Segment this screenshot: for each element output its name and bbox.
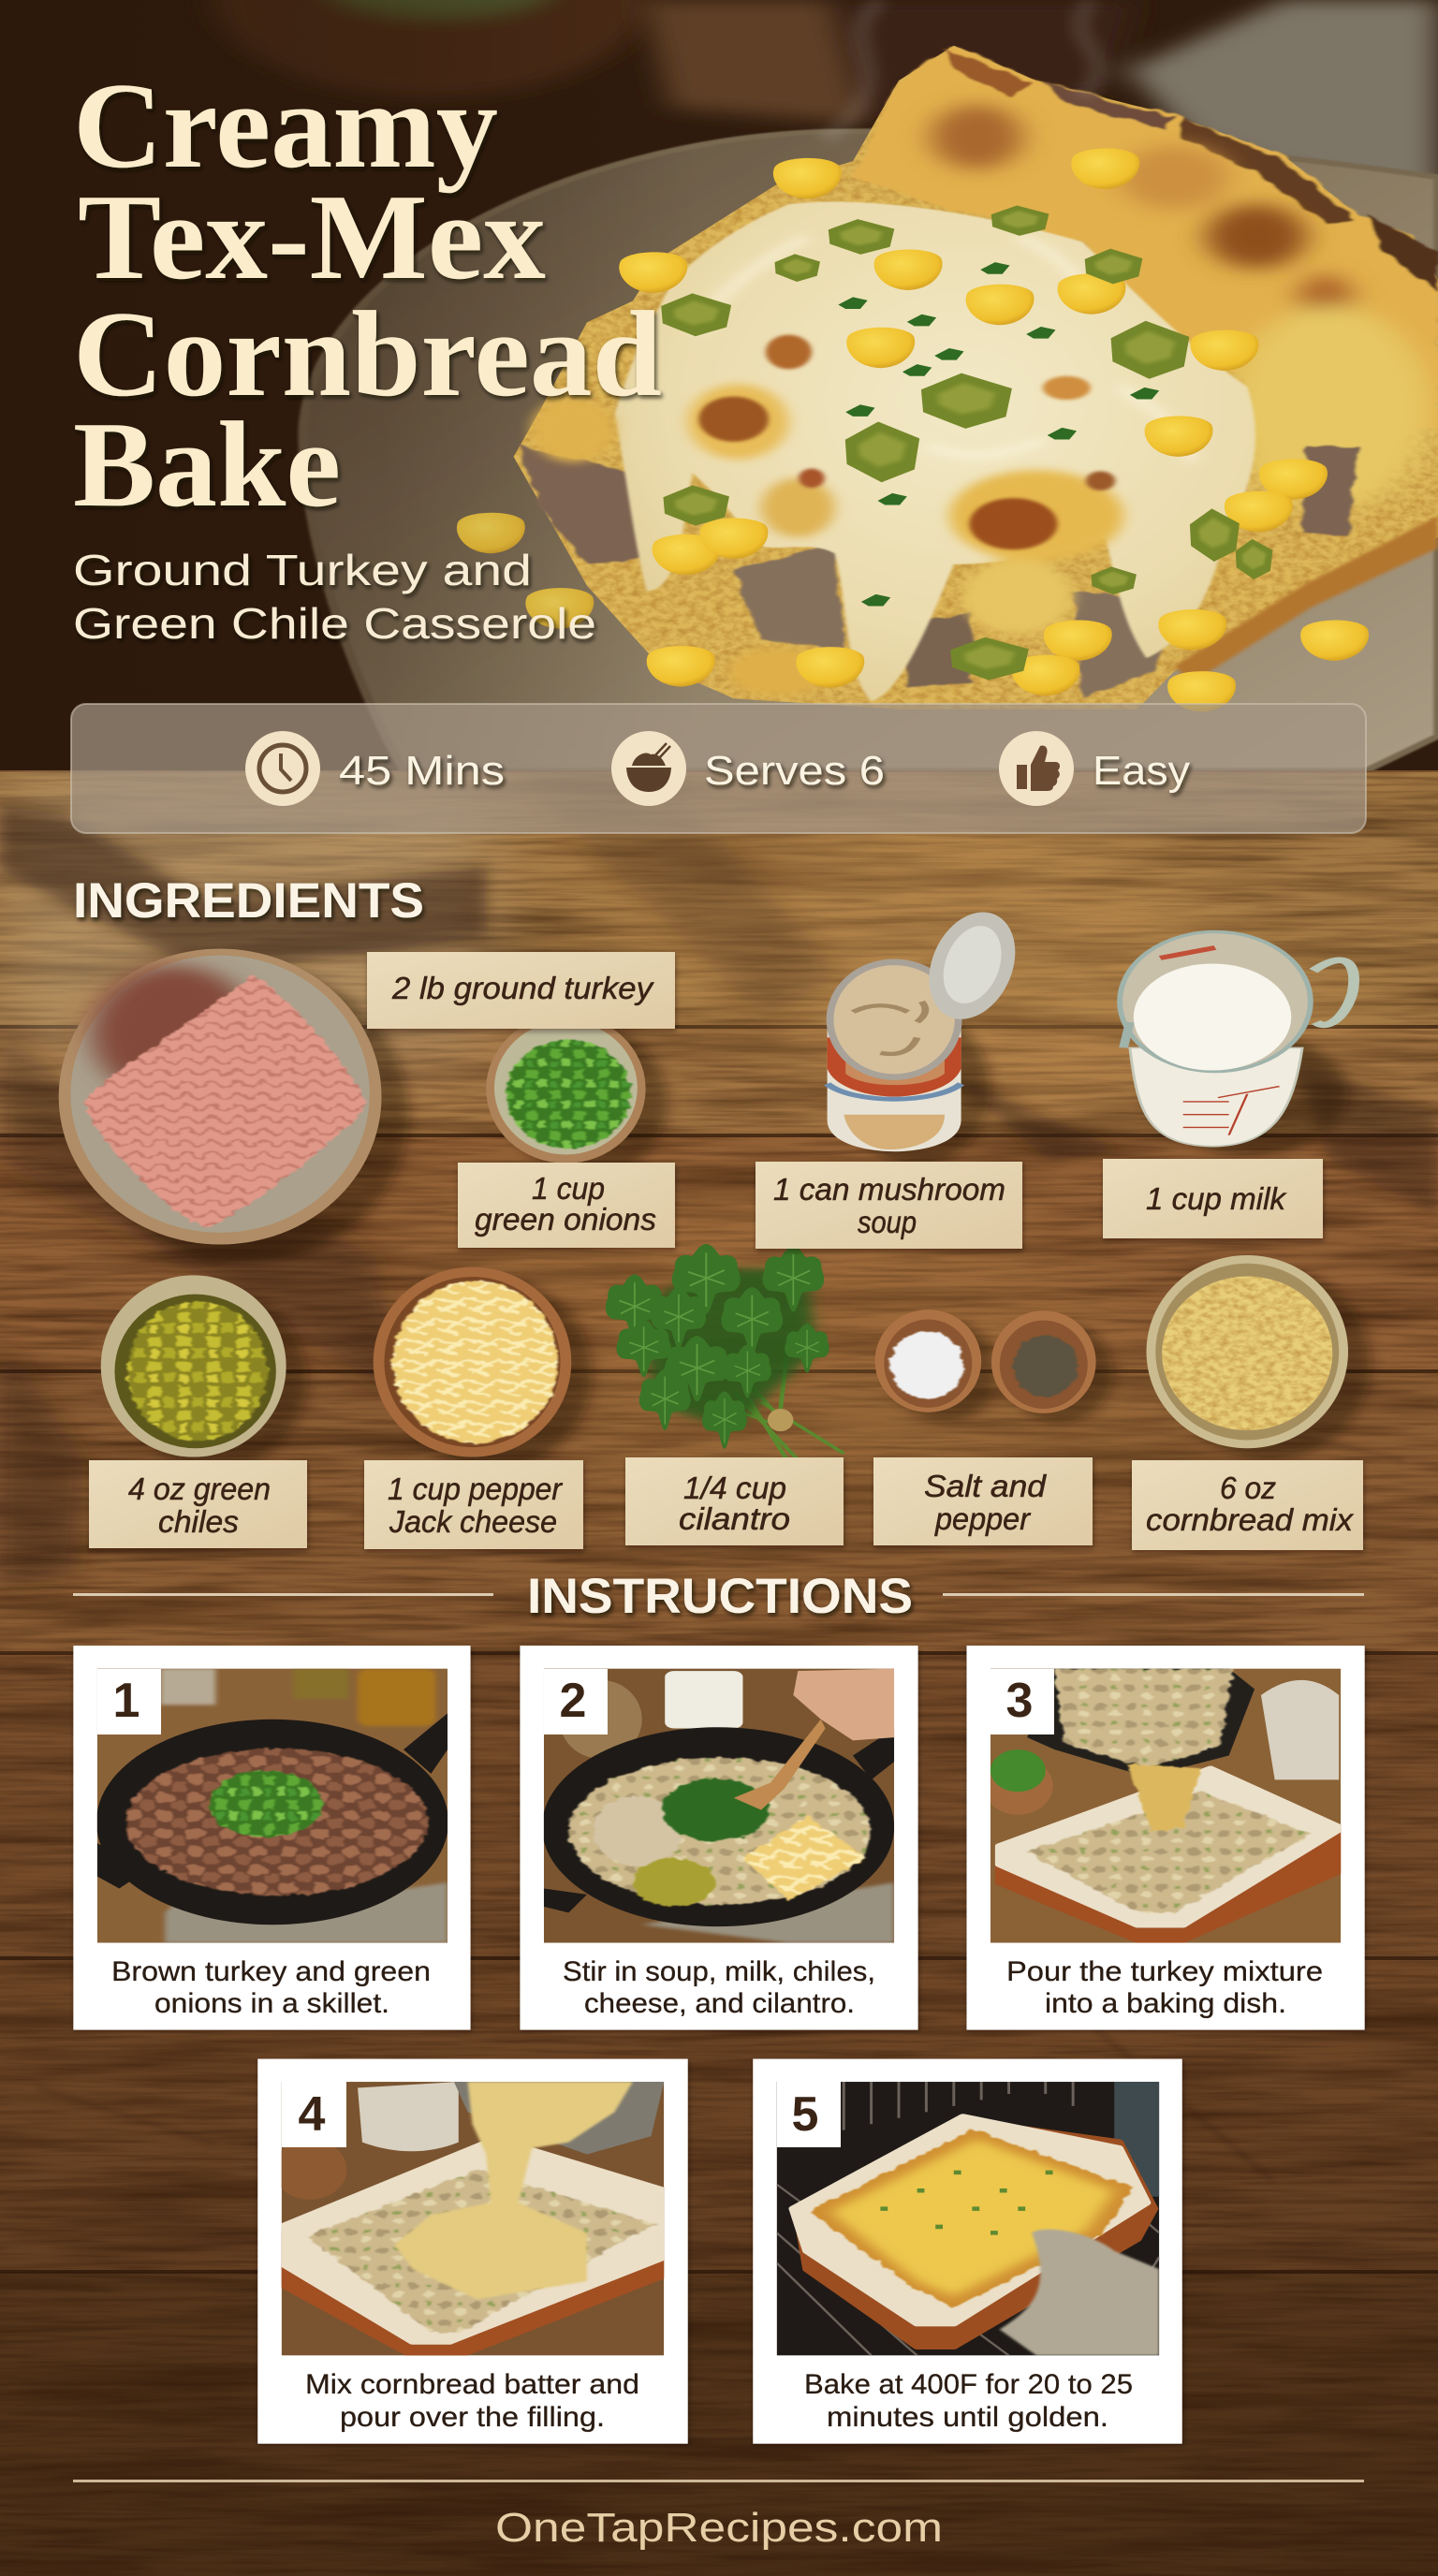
title: Tex-Mex (78, 169, 546, 305)
melted cheese (614, 202, 1255, 701)
text: time: 45 Mins (339, 748, 505, 794)
background wood beam and linen (638, 0, 1438, 175)
step 1 photo: browning turkey (96, 1669, 448, 1943)
label: pepper jack cheese: Jack cheese (389, 1504, 557, 1539)
step 5 number and caption: Bake at 400F for 20 to 25 (804, 2369, 1133, 2400)
step 3 number and caption: into a baking dish. (1045, 1988, 1286, 2019)
label: mushroom soup: 1 can mushroom (773, 1172, 1005, 1207)
label: ground turkey: 2 lb ground turkey (391, 971, 655, 1005)
step 5 card (753, 2059, 1182, 2444)
label: green onions: 1 cup (532, 1171, 605, 1206)
footer (73, 2480, 1364, 2551)
step 2 card (520, 1646, 918, 2030)
label: salt and pepper: pepper (934, 1501, 1032, 1536)
label: mushroom soup: soup (858, 1205, 917, 1239)
green chile bowl (101, 1275, 307, 1471)
cornbread mix bowl (1146, 1255, 1372, 1460)
hero photo: casserole slice on plate (0, 0, 1438, 770)
wood table background (0, 763, 1438, 2576)
footer: OneTapRecipes.com (495, 2505, 943, 2551)
green onion bowl (486, 1015, 668, 1178)
subtitle: Ground Turkey and (73, 546, 532, 594)
text: servings: Serves 6 (704, 748, 885, 794)
step 1 number and caption: onions in a skillet. (154, 1988, 389, 2019)
step 2 number and caption: Stir in soup, milk, chiles, (563, 1956, 875, 1987)
step 4 number and caption: 4 (299, 2087, 326, 2142)
icon: thumbs up (999, 731, 1074, 806)
step 2 photo: stirring filling (542, 1669, 894, 1943)
label: cornbread mix (1132, 1460, 1363, 1550)
pepper bowl (991, 1310, 1113, 1424)
step 1 card (73, 1646, 471, 2030)
meat layer (518, 446, 1357, 698)
title (73, 58, 662, 533)
label: green chiles (89, 1460, 307, 1548)
cheese sheen (697, 237, 1192, 462)
label: mushroom soup (756, 1162, 1022, 1249)
step 3 number and caption: Pour the turkey mixture (1006, 1956, 1323, 1987)
green chiles (661, 205, 1272, 681)
subtitle (73, 546, 596, 648)
label: pepper jack cheese: 1 cup pepper (388, 1471, 564, 1506)
step cards (73, 1646, 1365, 2444)
browned cheese spots (698, 335, 1115, 549)
ingredient photos (59, 909, 1372, 1485)
crust base edge (1174, 516, 1438, 682)
turkey bowl (59, 949, 409, 1264)
step 3 number and caption (990, 1669, 1323, 2019)
casserole body (514, 46, 1438, 710)
pepper jack cheese bowl (374, 1267, 593, 1470)
step 4 card (257, 2059, 688, 2444)
text: difficulty: Easy (1093, 748, 1190, 794)
step 2 number and caption: cheese, and cilantro. (584, 1988, 855, 2019)
label: cilantro: 1/4 cup (683, 1471, 786, 1505)
milk measuring cup (1120, 931, 1354, 1156)
step 2 number and caption: 2 (560, 1674, 586, 1728)
step 4 photo: adding batter (273, 2082, 664, 2355)
step 4 number and caption: Mix cornbread batter and (305, 2369, 639, 2400)
step 1 number and caption: 1 (113, 1674, 139, 1728)
info bar (71, 704, 1366, 833)
step 1 number and caption (97, 1669, 431, 2019)
step 5 number and caption (777, 2082, 1133, 2433)
label: green chiles: 4 oz green (128, 1471, 271, 1506)
title: Bake (73, 397, 341, 533)
subtitle: Green Chile Casserole (73, 599, 596, 648)
title: Creamy (73, 58, 498, 194)
label: milk (1103, 1159, 1323, 1238)
icon: clock (245, 731, 320, 806)
step 4 number and caption: pour over the filling. (340, 2402, 605, 2433)
label: cornbread mix: 6 oz (1220, 1471, 1276, 1505)
cilantro bunch (606, 1244, 844, 1485)
label: green onions (458, 1163, 675, 1248)
heading: ingredients: INGREDIENTS (73, 873, 424, 929)
plate (302, 131, 1438, 770)
label: green chiles: chiles (158, 1504, 239, 1539)
step 3 photo: pouring into dish (983, 1669, 1341, 1943)
steam (826, 0, 1098, 139)
label: salt and pepper (873, 1457, 1093, 1545)
ingredient labels (89, 952, 1363, 1550)
salt bowl (875, 1310, 998, 1423)
corn kernels (457, 149, 1369, 712)
background bowl (211, 0, 652, 96)
icon: bowl (611, 731, 686, 806)
title: Cornbread (73, 286, 662, 422)
mushroom soup can (827, 909, 1026, 1166)
browned crust (853, 46, 1438, 430)
label: ground turkey (367, 952, 675, 1029)
label: green onions: green onions (475, 1202, 656, 1237)
step 5 photo: baking in oven (777, 2082, 1159, 2355)
step 2 number and caption (544, 1669, 875, 2019)
heading: instructions: INSTRUCTIONS (527, 1569, 913, 1624)
label: cornbread mix: cornbread mix (1146, 1502, 1355, 1537)
step 5 number and caption: minutes until golden. (827, 2402, 1108, 2433)
parsley flecks (838, 262, 1159, 606)
step 3 card (966, 1646, 1365, 2030)
label: pepper jack cheese (364, 1460, 583, 1549)
step 3 number and caption: 3 (1006, 1674, 1033, 1728)
label: cilantro: cilantro (679, 1501, 790, 1536)
step 4 number and caption (282, 2082, 639, 2433)
step 1 number and caption: Brown turkey and green (111, 1956, 431, 1987)
label: salt and pepper: Salt and (924, 1469, 1048, 1503)
label: cilantro (625, 1457, 844, 1545)
step 5 number and caption: 5 (792, 2087, 818, 2142)
label: milk: 1 cup milk (1146, 1181, 1286, 1216)
golden crumb patches (532, 384, 1123, 695)
heading: instructions (73, 1569, 1364, 1624)
